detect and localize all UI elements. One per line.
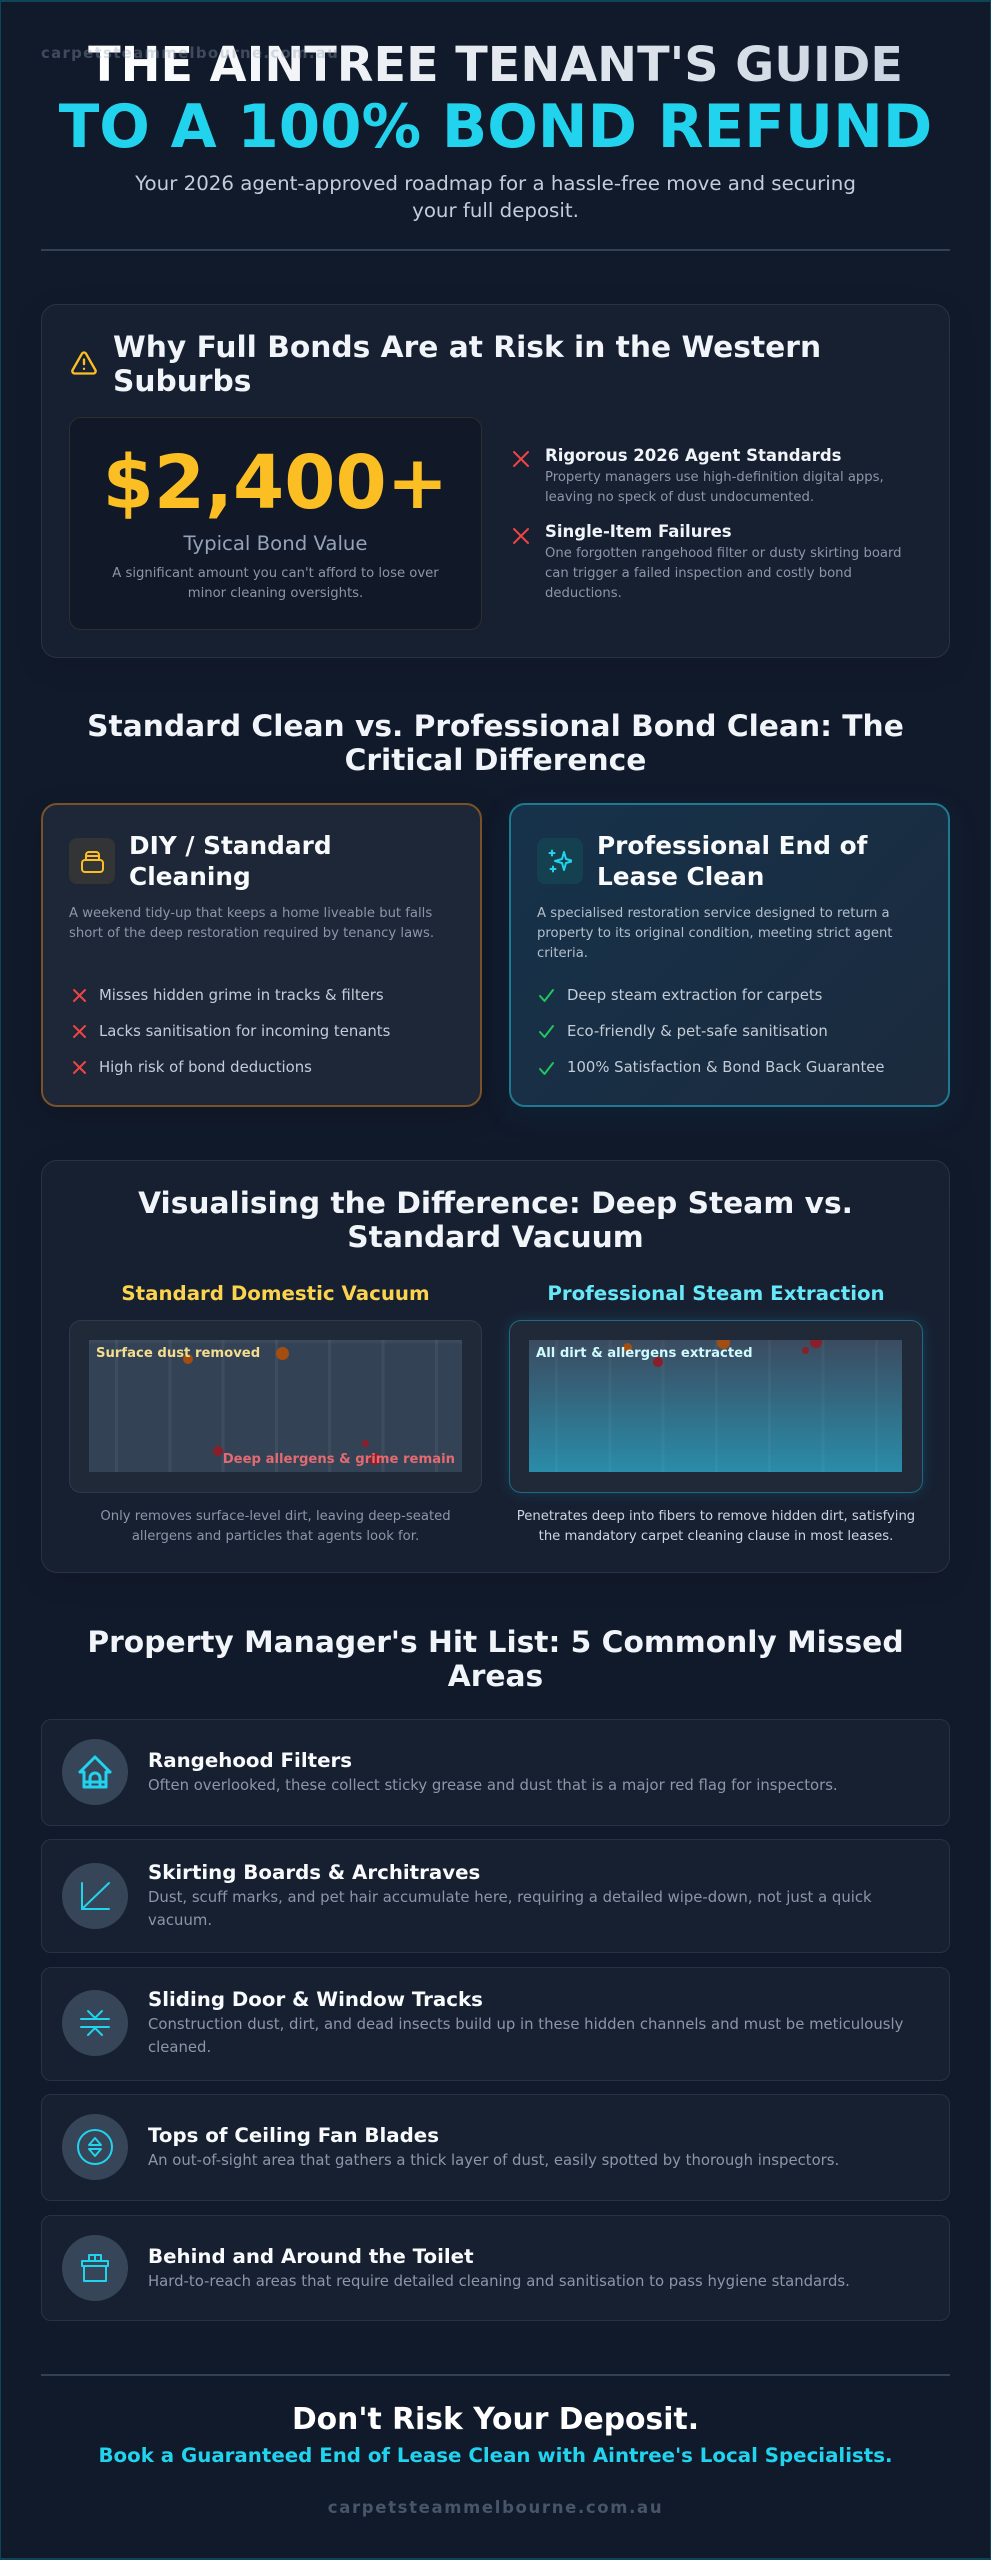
diagram: steam carpet [509,1320,923,1493]
panel: toilet item [41,2215,950,2321]
diagram: vacuum carpet [69,1320,482,1493]
panel: skirting item [41,1839,950,1953]
heading: why full bonds: Why Full Bonds Are at Risk in the Western [113,330,821,365]
stat description: minor cleaning oversights. [188,586,363,601]
icon: bottle [69,838,115,884]
item text: Hard-to-reach areas that require detailed cleaning and sanitisation to pass hygiene standards. [148,2272,850,2290]
icon: red cross 1 [513,451,529,467]
icon: cross [73,1061,86,1074]
item text: An out-of-sight area that gathers a thick layer of dust, easily spotted by thorough inspectors. [148,2151,839,2169]
icon: rangehood [62,1739,128,1805]
item title: Skirting Boards & Architraves [148,1861,480,1884]
caption: vacuum: allergens and particles that agents look for. [132,1529,419,1544]
stat description: A significant amount you can't afford to lose over [112,566,439,581]
caption: steam: Penetrates deep into fibers to remove hidden dirt, satisfying [517,1509,915,1524]
card text: DIY: A weekend tidy-up that keeps a home liveable but falls [69,906,432,921]
risk text: single-item failures: One forgotten rangehood filter or dusty skirting board [545,546,902,561]
panel: visualising the difference [41,1160,950,1573]
card title: DIY: DIY / Standard [129,831,332,860]
stat description [112,566,439,601]
card title: professional: Lease Clean [597,862,764,891]
risk text: agent standards [545,470,884,505]
allergen particle [810,1336,822,1348]
subtitle: your full deposit. [412,199,579,222]
card title: professional [597,831,868,891]
item title: Rangehood Filters [148,1749,352,1772]
icon: tracks [62,1990,128,2056]
panel: rangehood item [41,1719,950,1826]
title line 2: TO A 100% BOND REFUND [59,93,932,162]
card text: DIY: short of the deep restoration required by tenancy laws. [69,926,434,941]
heading: why full bonds [113,330,821,399]
allergen particle [213,1446,223,1456]
heading: hit list: Property Manager's Hit List: 5 Commonly Missed [87,1625,904,1660]
watermark bottom: carpetsteammelbourne.com.au [328,2498,663,2517]
icon: check [539,1062,554,1075]
list: professional positives [539,986,885,1076]
item title: Sliding Door & Window Tracks [148,1988,483,2011]
card text: professional: property to its original condition, meeting strict agent [537,926,892,941]
list item: Misses hidden grime in tracks & filters [99,986,384,1004]
list item: 100% Satisfaction & Bond Back Guarantee [567,1058,885,1076]
icon: sparkles [537,838,583,884]
header divider [41,249,950,251]
list item: Deep steam extraction for carpets [567,986,822,1004]
panel: professional card [509,803,950,1107]
heading: hit list: Areas [448,1659,543,1694]
allergen particle [802,1347,809,1354]
risk item: agent standards: Rigorous 2026 Agent Standards [545,446,841,465]
item text: Construction dust, dirt, and dead insects build up in these hidden channels and must be meticulously [148,2015,903,2033]
stat value: $2,400+ [103,441,448,526]
dirt particle [623,1343,632,1352]
panel: tracks item [41,1967,950,2081]
risk text: single-item failures: can trigger a failed inspection and costly bond [545,566,852,581]
list item: High risk of bond deductions [99,1058,312,1076]
panel: DIY card [41,803,482,1107]
subtitle: Your 2026 agent-approved roadmap for a hassle-free move and securing [135,172,856,195]
dirt particle [183,1354,193,1364]
label: all dirt extracted: All dirt & allergens extracted [536,1346,753,1361]
card text: professional: A specialised restoration service designed to return a [537,906,890,921]
card title: professional: Professional End of [597,831,867,860]
footer divider [41,2374,950,2376]
dirt particle [717,1336,730,1349]
item text: vacuum. [148,1911,212,1929]
heading: hit list [87,1625,904,1694]
heading: why full bonds: Suburbs [113,364,251,399]
item title: Behind and Around the Toilet [148,2245,474,2268]
panel: fan item [41,2094,950,2201]
icon: check [539,989,554,1002]
allergen particle [369,1453,381,1465]
item text: Dust, scuff marks, and pet hair accumulate here, requiring a detailed wipe-down, not just a quick [148,1888,872,1906]
icon: red cross 2 [513,528,529,544]
heading: standard vs professional: Standard Clean vs. Professional Bond Clean: The [87,709,904,744]
allergen particle [362,1440,369,1447]
subheading: steam: Professional Steam Extraction [547,1282,885,1305]
call to action heading: Don't Risk Your Deposit. [292,2402,699,2437]
stat box: typical bond value [69,417,482,630]
caption: steam: the mandatory carpet cleaning clause in most leases. [539,1529,893,1544]
watermark top: carpetsteammelbourne.com.au [41,44,339,62]
icon: cross [73,1025,86,1038]
caption: steam [517,1509,915,1544]
icon: check [539,1025,554,1038]
subheading: vacuum: Standard Domestic Vacuum [121,1282,430,1305]
carpet swatch: vacuum [89,1340,462,1472]
card text: professional [537,906,892,961]
card text: DIY [69,906,434,941]
risk text: single-item failures: deductions. [545,586,622,601]
item text: cleaned. [148,2038,211,2056]
icon: ceiling fan [62,2114,128,2180]
caption: vacuum: Only removes surface-level dirt, leaving deep-seated [100,1509,451,1524]
icon: toilet box [62,2235,128,2301]
heading: visualising [138,1186,853,1255]
fibre texture [529,1340,902,1472]
risk text: single-item failures [545,546,902,601]
fibre texture [89,1340,462,1472]
item text [148,2015,903,2056]
call to action text: Book a Guaranteed End of Lease Clean with Aintree's Local Specialists. [98,2444,893,2467]
list: DIY negatives [73,986,390,1076]
allergen particle [653,1357,663,1367]
icon: cross [73,989,86,1002]
stat label: Typical Bond Value [183,532,368,555]
heading: visualising: Standard Vacuum [347,1220,644,1255]
item text: Often overlooked, these collect sticky grease and dust that is a major red flag for inspectors. [148,1776,838,1794]
card text: professional: criteria. [537,946,588,961]
subtitle [135,172,856,222]
list item: Lacks sanitisation for incoming tenants [99,1022,390,1040]
carpet swatch: steam [529,1340,902,1472]
panel: why bonds are at risk [41,304,950,658]
item title: Tops of Ceiling Fan Blades [148,2124,439,2147]
icon: skirting [62,1863,128,1929]
heading: standard vs professional [87,709,904,778]
heading: visualising: Visualising the Difference: Deep Steam vs. [138,1186,853,1221]
card title: DIY: Cleaning [129,862,251,891]
list item: Eco-friendly & pet-safe sanitisation [567,1022,828,1040]
dirt particle [276,1347,289,1360]
risk item: single-item failures: Single-Item Failures [545,522,732,541]
risk text: agent standards: Property managers use high-definition digital apps, [545,470,884,485]
caption: vacuum [100,1509,451,1544]
title line 1: THE AINTREE TENANT'S GUIDE [88,38,903,93]
label: surface dust: Surface dust removed [96,1346,260,1361]
item text [148,1888,872,1929]
icon: warning triangle [71,351,97,375]
label: deep allergens: Deep allergens & grime remain [223,1452,455,1467]
card title: DIY [129,831,332,891]
heading: standard vs professional: Critical Difference [345,743,646,778]
risk text: agent standards: leaving no speck of dust undocumented. [545,490,814,505]
